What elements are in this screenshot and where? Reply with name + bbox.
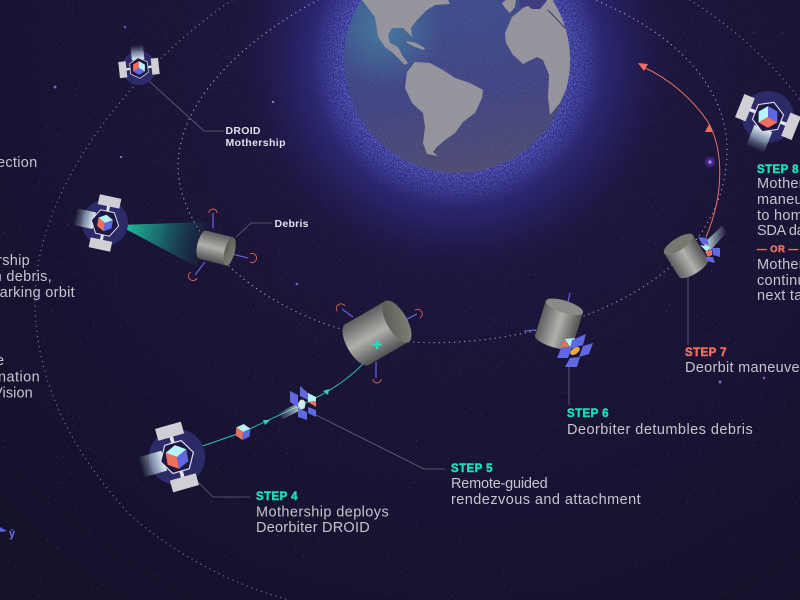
label: Debris: Debris [274, 218, 309, 230]
step 6 debris with deorbiter [524, 293, 593, 367]
label: step 5: rendezvous and attachment [451, 492, 641, 508]
deorbiter cube in transit [235, 423, 251, 441]
step 8 mothership [727, 81, 800, 161]
label: step 5 [451, 463, 641, 508]
leader: step 5 [316, 415, 445, 469]
label: step 8: — OR — [757, 244, 799, 255]
land: South America [405, 62, 483, 156]
debris with tumble arrows [188, 209, 257, 281]
label: step 5: Remote-guided [451, 476, 548, 492]
label: step 4: Mothership deploys [256, 504, 389, 520]
large debris with tumble arrows [336, 296, 422, 383]
step 5 deorbiter with panels [278, 386, 316, 420]
Mediterranean [519, 0, 547, 9]
leader: step 4 [198, 482, 250, 497]
leader: DROID Mothership [149, 81, 224, 131]
bright stars [54, 26, 765, 383]
Earth [327, 0, 570, 173]
inspection beam [118, 222, 207, 267]
land: Africa [505, 0, 570, 115]
axis label [0, 527, 16, 540]
label: step 4 [256, 491, 389, 536]
atmosphere halo [242, 0, 672, 275]
label: step 8: STEP 8 [757, 164, 799, 176]
label: step 7 [685, 347, 800, 376]
orbit transfer arrow [638, 63, 720, 237]
label: DROID Mothership: DROID [226, 125, 261, 137]
land: Cuba [407, 41, 425, 50]
land: North America [362, 0, 450, 65]
axis label: ȳ [9, 528, 16, 540]
inspecting mothership [69, 190, 133, 254]
label: step 6: Deorbiter detumbles debris [567, 422, 753, 438]
left text: mothership rendezvous fragment: arking orbit [0, 285, 75, 301]
label: step 4: Deorbiter DROID [256, 520, 370, 536]
debris ring around Earth [309, 0, 605, 208]
label: step 5: STEP 5 [451, 463, 493, 475]
Red Sea [548, 10, 565, 28]
attachment target [372, 340, 382, 349]
inner orbit [178, 0, 727, 343]
DROID Mothership satellite [117, 43, 161, 87]
step 7 debris with deorbiter firing [661, 226, 727, 282]
step 4 mothership [132, 418, 213, 499]
land: Europe [502, 0, 516, 13]
label: step 4: STEP 4 [256, 491, 298, 503]
deployment trajectory [194, 345, 377, 449]
label: step 8 [757, 164, 800, 304]
leader: Debris [236, 223, 272, 237]
leader: step 7 [687, 277, 689, 345]
label: step 7: STEP 7 [685, 347, 727, 359]
label: step 6 [567, 408, 753, 438]
leader: step 6 [568, 367, 570, 405]
label: DROID Mothership: Mothership [226, 137, 286, 149]
label: step 6: STEP 6 [567, 408, 609, 420]
